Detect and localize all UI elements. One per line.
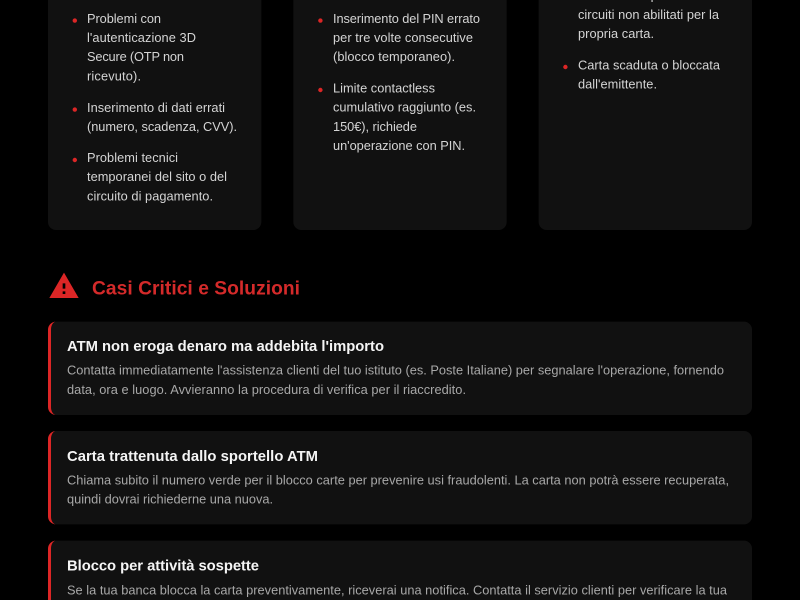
panel: block for suspicious activity [48, 541, 752, 600]
bullet list: online problems: ricevuto). [87, 68, 141, 84]
bullet list: online problems: temporanei del sito o del [87, 169, 227, 184]
description: Chiama subito il numero verde per il blocco carte per prevenire usi fraudolenti. La carta non potrà essere recuperata, [67, 472, 729, 488]
bullet list: online problems: l'autenticazione 3D [87, 30, 196, 45]
description: Se la tua banca blocca la carta preventivamente, riceverai una notifica. Contatta il servizio clienti per verificare la tua [67, 582, 728, 598]
description [67, 362, 724, 397]
bullet list: PIN and contactless problems: un'operazione con PIN. [333, 138, 465, 153]
bullet list: PIN and contactless problems: cumulativo raggiunto (es. [333, 100, 476, 114]
panel: block for suspicious activity: Blocco per attività sospette [67, 558, 259, 574]
bullet list: online problems: circuito di pagamento. [87, 188, 213, 204]
bullet list: PIN and contactless problems: per tre volte consecutive [333, 30, 473, 45]
bullet list: online problems: Problemi tecnici [87, 150, 178, 165]
panel: online payment issues [48, 0, 261, 230]
bullet list: card problems: Carta scaduta o bloccata [578, 58, 721, 72]
bullet list: online problems: (numero, scadenza, CVV). [87, 119, 237, 134]
panel: card retained by ATM: Carta trattenuta dallo sportello ATM [67, 449, 318, 465]
bullet list: online problems: Problemi con [87, 11, 161, 26]
bullet list: PIN and contactless problems: Limite contactless [333, 80, 435, 96]
bullet list: card problems: dall'emittente. [578, 76, 657, 92]
bullet list: PIN and contactless problems: (blocco temporaneo). [333, 49, 455, 64]
bullet list: online problems [73, 11, 237, 204]
bullet list: PIN and contactless problems: 150€), richiede [333, 119, 417, 134]
bullet list: card problems: circuiti non abilitati per la [578, 7, 720, 22]
description [67, 472, 729, 506]
panel: ATM does not dispense cash: ATM non eroga denaro ma addebita l'importo [67, 339, 384, 355]
panel: card retained by ATM [48, 431, 752, 524]
bullet list: card problems: propria carta. [578, 26, 654, 41]
panel: ATM does not dispense cash [48, 322, 752, 415]
description: quindi dovrai richiederne una nuova. [67, 492, 273, 506]
icon: warning triangle [49, 273, 79, 298]
description: data, ora e luogo. Avvieranno la procedura di verifica per il riaccredito. [67, 382, 466, 397]
heading: critical cases: Casi Critici e Soluzioni [92, 278, 300, 300]
heading: critical cases [49, 273, 300, 300]
bullet list: PIN and contactless problems: Inserimento del PIN errato [333, 11, 480, 26]
panel: in-store payment issues [293, 0, 507, 230]
bullet list: PIN and contactless problems [318, 11, 480, 153]
panel: card and circuit issues [539, 0, 752, 230]
bullet list: online problems: Inserimento di dati errati [87, 100, 225, 115]
description: Contatta immediatamente l'assistenza clienti del tuo istituto (es. Poste Italiane) per segnalare l'operazione, fornendo [67, 362, 724, 378]
bullet list: card problems [563, 0, 721, 92]
bullet list: online problems: Secure (OTP non [87, 49, 184, 64]
